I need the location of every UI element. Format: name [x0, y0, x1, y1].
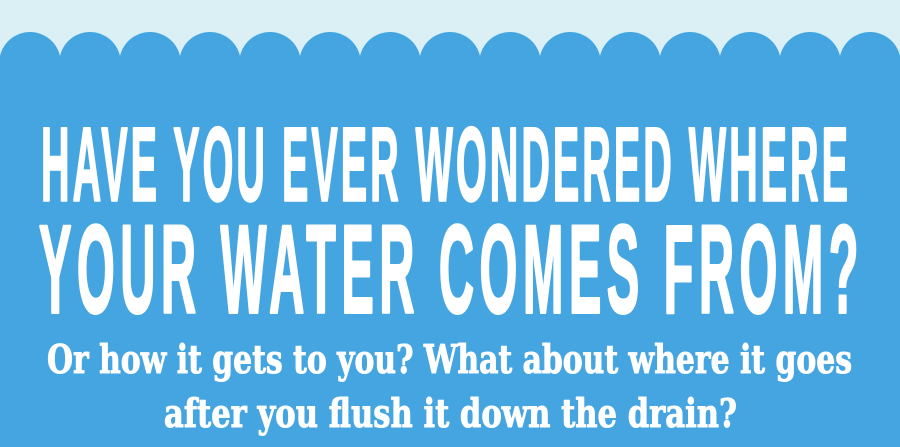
subheading [47, 337, 852, 437]
heading [39, 106, 864, 340]
subheading line 2: after you flush it down the drain? [164, 391, 737, 437]
